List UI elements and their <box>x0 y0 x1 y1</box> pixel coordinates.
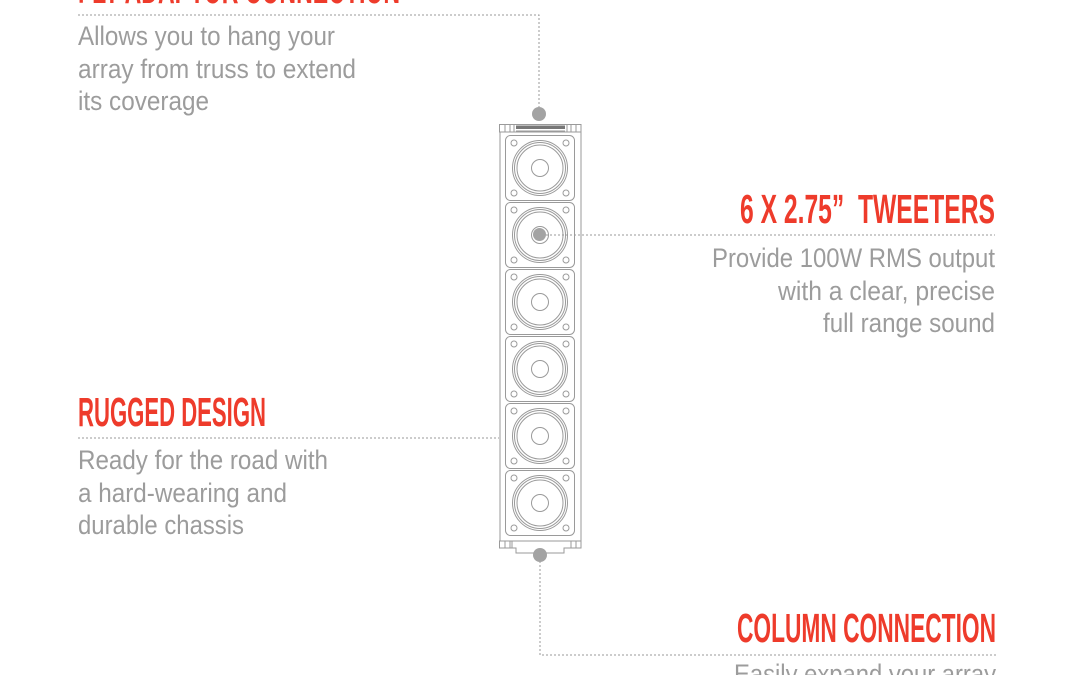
heading: rugged design: RUGGED DESIGN <box>78 389 266 435</box>
text: tweeters description: with a clear, precise <box>777 276 995 306</box>
bottom bracket <box>500 541 581 553</box>
tweeter 1 <box>506 136 574 200</box>
text: adaptor description: array from truss to extend <box>78 54 356 84</box>
tweeter 2 <box>506 202 574 268</box>
text: rugged description: durable chassis <box>78 510 244 540</box>
marker: bottom connection <box>533 548 547 562</box>
marker: top connection <box>532 107 546 121</box>
callout: tweeters <box>546 186 995 338</box>
text: adaptor description: its coverage <box>78 86 209 116</box>
text: rugged description <box>78 445 328 540</box>
cabinet body <box>500 132 581 541</box>
tweeter 6 <box>506 470 574 536</box>
top bracket <box>500 124 581 132</box>
tweeter 5 <box>506 404 574 468</box>
marker: tweeter centre <box>533 228 546 241</box>
tweeter 4 <box>506 336 574 402</box>
text: tweeters description: full range sound <box>823 308 995 338</box>
callout: rugged design <box>78 389 499 540</box>
text: tweeters description: Provide 100W RMS output <box>712 243 995 273</box>
text: adaptor description <box>78 21 356 116</box>
text: tweeters description <box>712 243 995 338</box>
callout: column connection <box>540 561 997 675</box>
callout: top adaptor connection <box>78 0 539 116</box>
tweeter 3 <box>506 270 574 334</box>
speaker column illustration <box>500 107 581 562</box>
text: adaptor description: Allows you to hang your <box>78 21 335 51</box>
text: rugged description: a hard-wearing and <box>78 478 287 508</box>
text: rugged description: Ready for the road with <box>78 445 328 475</box>
